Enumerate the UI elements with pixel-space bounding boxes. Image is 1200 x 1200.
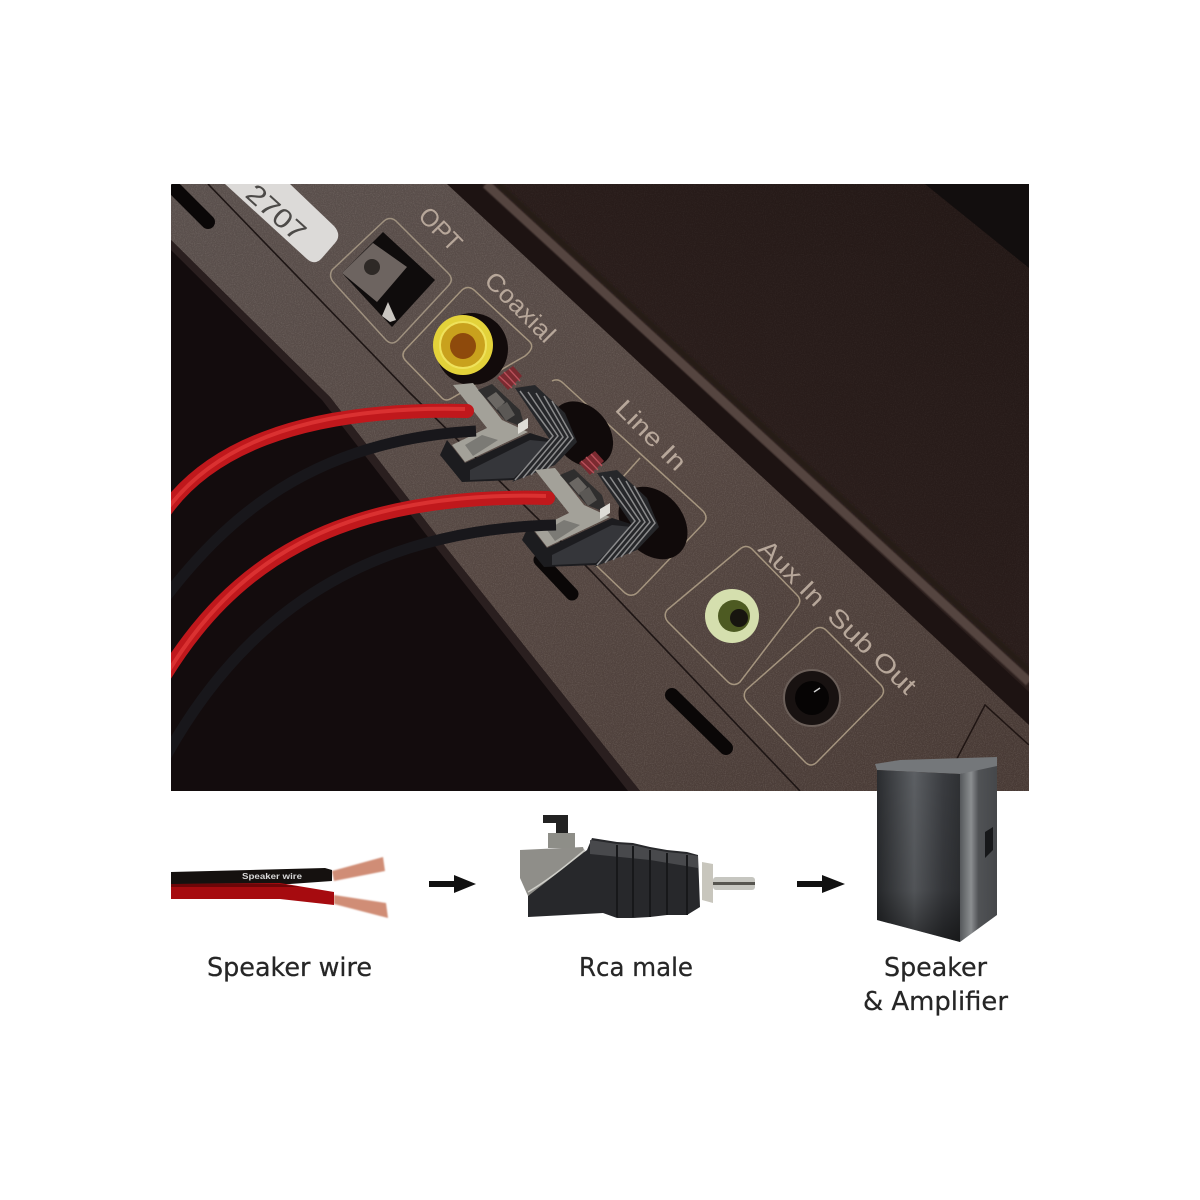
port: Sub Out — [744, 602, 922, 765]
wire: upper black — [165, 431, 476, 598]
wire: lower red — [165, 498, 548, 675]
label: Rca male: Rca male — [579, 953, 693, 983]
serial label: 2707 — [240, 178, 312, 247]
panel edge groove — [447, 184, 1029, 725]
label: Speaker & Amplifier — [863, 953, 1008, 1017]
plug: lower RCA adapter — [522, 451, 659, 567]
front panel band — [171, 184, 1029, 791]
port: Aux In: Aux In — [753, 534, 831, 612]
arrow: wire to RCA — [429, 875, 476, 893]
photo: rear panel of device with connected plugs — [165, 178, 1029, 791]
slot: middle — [540, 560, 572, 594]
serial label — [225, 178, 338, 262]
port: Coaxial — [403, 266, 561, 400]
wire: upper red — [165, 411, 467, 511]
port: OPT — [331, 202, 468, 343]
label: Speaker & Amplifier: Speaker — [884, 953, 987, 983]
label: Speaker wire: Speaker wire — [207, 953, 372, 983]
arrow: RCA to speaker — [797, 875, 845, 893]
port: Aux In — [665, 534, 831, 684]
seam lower right — [956, 704, 1029, 758]
slot: upper left — [176, 190, 208, 222]
label: Speaker & Amplifier: & Amplifier — [863, 987, 1008, 1017]
shade at the lower edge of the panel — [171, 240, 640, 791]
speaker wire: Speaker wire — [242, 872, 303, 881]
port: Line In — [538, 380, 706, 595]
port: Line In: Line In — [610, 394, 692, 476]
top surface of device — [482, 184, 1029, 692]
port: OPT: OPT — [413, 202, 468, 257]
copper strands — [332, 857, 388, 918]
speaker wire — [171, 857, 388, 918]
port: Sub Out: Sub Out — [822, 602, 922, 700]
slot: lower — [672, 695, 726, 748]
plug: upper RCA adapter — [440, 366, 577, 482]
speaker cabinet — [875, 757, 997, 942]
dark background below panel — [171, 240, 640, 791]
port: Coaxial: Coaxial — [479, 266, 561, 348]
RCA male plug — [520, 815, 755, 918]
wire: lower black — [165, 525, 556, 758]
recess line — [208, 184, 800, 791]
